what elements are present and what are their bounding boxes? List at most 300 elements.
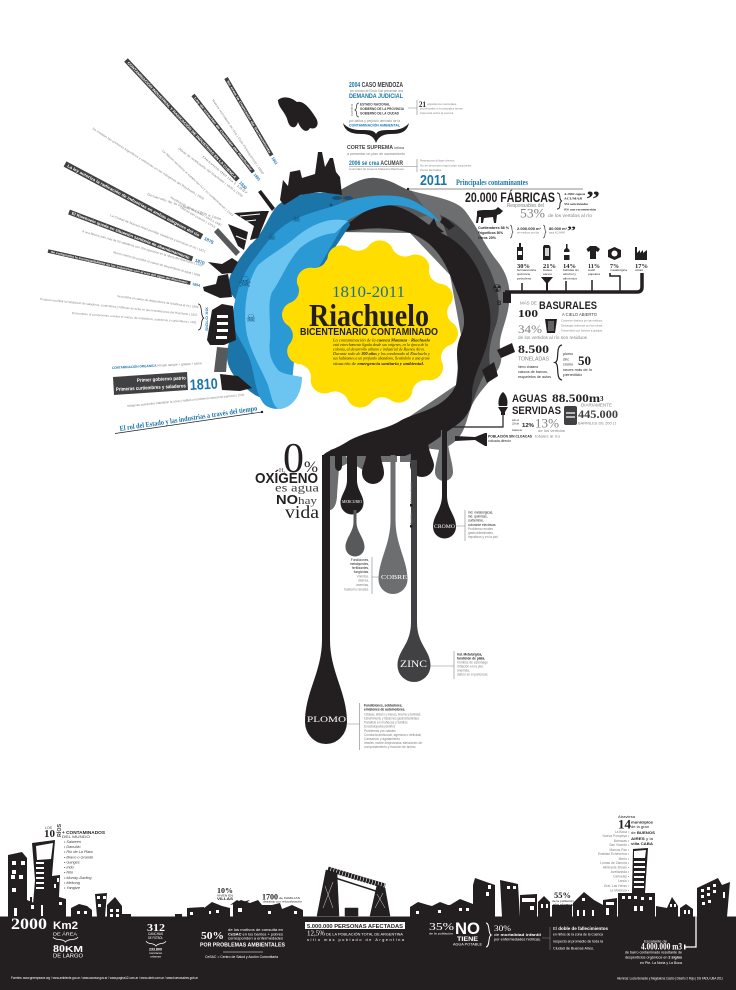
- ships on the right bank: [497, 343, 515, 358]
- sewage block: totales al río: [535, 434, 560, 438]
- drips of heavy metals: CROMO: [434, 525, 455, 530]
- bar 1870: 1870: [194, 258, 206, 266]
- ten rivers list: LOS: [45, 826, 53, 830]
- Mendoza case column: injerencia sobre la cuenca.: [420, 111, 454, 115]
- villas and families: 10%: [217, 886, 233, 895]
- bar 1875: [64, 161, 215, 246]
- factory skyline: [280, 152, 342, 205]
- note: lead: Cansancio y agotamiento: [364, 737, 400, 741]
- note: chromium: hepáticos y en la piel.: [468, 535, 499, 539]
- note: zinc: Vómitos de estómago: [457, 660, 488, 664]
- sewage block: 12%: [522, 423, 535, 429]
- scrap metal block: 8.500: [518, 342, 549, 356]
- radial notes: Nueva normativa de ríos | Polo Petroquímico | 1960: [211, 98, 265, 176]
- Mendoza case column: [343, 80, 472, 172]
- icon: drop and pipe: [498, 392, 508, 415]
- scrap metal block: cromo: [563, 362, 573, 366]
- municipality list: Lomas de Zamora •: [600, 861, 630, 865]
- football pitches: urbanas: [150, 954, 162, 958]
- villas and families: VILLAS: [217, 897, 234, 901]
- sewage block: 445.000: [578, 409, 618, 421]
- first government block: CONTAMINACIÓN ORGÁNICA Arrojan sangre + grasas + carne: [112, 360, 202, 370]
- radial notes: Rectificación del Riachuelo | 1916 a 1930: [170, 195, 222, 227]
- bar 1870: El Riachuelo queda en situación sanitaria de abandonamiento: [71, 211, 191, 260]
- ten rivers list: • Nilo: [64, 870, 73, 874]
- industry icons and percentages: bebidas sin: [563, 268, 579, 272]
- fourteen municipalities: villa CABA: [631, 841, 653, 846]
- basin size: 2000: [11, 916, 47, 933]
- mud volume: de barro contaminado resultante de: [625, 950, 682, 954]
- municipality list: Merlo •: [619, 857, 630, 861]
- industry icons and percentages: 17%: [635, 263, 648, 270]
- sewage block: DIARIAMENTE: [581, 402, 612, 408]
- radial notes: La Ciudad de Buenos Aires prohíbe saladeros y barracas al río | 1871: [110, 213, 207, 254]
- note: zinc: Ind. Metalúrgica,: [457, 652, 482, 656]
- landfills block: Contienen distintos por las residuos.: [561, 318, 603, 322]
- landfills block: Descargas indirectas por las rutinas.: [561, 324, 603, 328]
- role of the state heading: El rol del Estado y las industrias a través del tiempo: [119, 404, 258, 433]
- industry icons and percentages: farmacéutica: [517, 268, 536, 272]
- fourteen municipalities: 14: [618, 816, 632, 832]
- fourteen municipalities: municipios: [631, 820, 653, 824]
- no sewers stat: [552, 891, 575, 907]
- cow icon: [476, 207, 503, 223]
- Mendoza case column: 2006 se crea ACUMAR: [349, 160, 403, 167]
- municipality list: Avellaneda •: [611, 870, 630, 874]
- note: zinc: anemias,: [457, 668, 470, 672]
- icon: can: [543, 245, 550, 260]
- sewage block: 12% del: [512, 422, 519, 426]
- brace century: SIGLO XIX: [205, 306, 209, 331]
- football pitches: [146, 923, 166, 958]
- affected people: DE LA POBLACIÓN TOTAL DE ARGENTINA: [326, 932, 403, 936]
- municipality list: Nueva Pompeya •: [603, 834, 630, 838]
- radial notes: La Nación reconoce el estado del río y su contaminación | 1943: [161, 149, 235, 217]
- note: copper: [344, 557, 379, 594]
- infant mortality: [494, 924, 609, 950]
- note: chromium: curtiembre,: [468, 518, 484, 522]
- ten rivers list: • Danubio: [64, 845, 81, 849]
- factories block: de residuos por día: [517, 230, 540, 234]
- sewage block: tratamiento: [512, 428, 522, 432]
- Mendoza case column: 2004 CASO MENDOZA: [349, 80, 403, 89]
- villas and families: [217, 886, 302, 904]
- first government block: Primeras curtiembres y saladeros: [116, 383, 186, 393]
- bottom skyline windows: [11, 843, 725, 917]
- sewage block: sólo el: [512, 418, 519, 422]
- radial notes: Encuentran al compromiso a evitar el vuelco de mataderos, saladeros y curtiembres | 1811: [72, 311, 197, 324]
- landfills block: [518, 300, 603, 341]
- central title: [300, 284, 438, 366]
- scrap metal block: zinc: [563, 358, 569, 362]
- municipality list: La Boca •: [615, 830, 630, 834]
- first government block: [112, 360, 263, 434]
- central title: Riachuelo: [309, 297, 429, 333]
- main polluters heading: Principales contaminantes: [456, 178, 528, 187]
- vertical labels: [409, 481, 413, 528]
- drips of heavy metals: ZINC: [400, 659, 427, 669]
- no potable water: 35%: [429, 922, 454, 933]
- scrap metal block: plomo: [563, 352, 573, 356]
- zero oxygen statement: vida: [285, 502, 319, 522]
- no sewers stat: de la población: [552, 899, 574, 903]
- landfills block: BASURALES: [539, 300, 597, 312]
- trumpet outlet: [455, 433, 487, 446]
- villas and families: VIVEN EN: [217, 894, 233, 898]
- ten rivers list: • Bravo o Grande: [64, 856, 93, 860]
- factories block: 20.000 FÁBRICAS: [465, 190, 555, 205]
- transporter bridge: [317, 869, 390, 916]
- ten rivers list: • Ganges: [64, 860, 80, 864]
- football pitches: 233.800: [149, 948, 162, 952]
- note: zinc: fundición de plata.: [457, 656, 485, 660]
- bottom black band: [0, 916, 736, 990]
- icon: factory: [635, 247, 647, 260]
- factory silhouettes on top band: [425, 218, 444, 234]
- ships: [228, 211, 269, 250]
- sewage block: BARRILES DE 200 Lt: [578, 422, 616, 426]
- industry icons and percentages: tintes: [543, 268, 553, 272]
- icon: radiation: ☢: [492, 282, 502, 295]
- sewage block: volcada directo: [488, 439, 511, 443]
- Mendoza case column: por daños y perjuicio derivado de la: [349, 119, 400, 123]
- mustache brace: [343, 123, 409, 143]
- drip: chromium grey: [435, 430, 453, 481]
- zero oxygen statement: OXÍGENO: [255, 470, 318, 487]
- drip: lead: [305, 455, 347, 744]
- factories block: Otros 20%: [478, 236, 497, 240]
- factories block: Responsables del: [507, 203, 544, 209]
- Mendoza case column: No se denuncia ningún plan sanciones.: [420, 164, 472, 168]
- drip: mercury: [340, 445, 364, 514]
- industry icons and percentages: alcohol y: [563, 272, 577, 276]
- industry icons and percentages: 11%: [588, 263, 600, 270]
- fourteen municipalities: Atraviesa: [618, 815, 635, 819]
- factories block: [465, 186, 600, 240]
- note: lead: Conducta antisocial, agresiva o delictual: [364, 733, 421, 737]
- note: lead: Estreñimiento y trastornos gastrointestinales: [364, 716, 419, 720]
- mud volume: 4.000.000 m3: [641, 942, 682, 952]
- ten rivers list: DEL MUNDO: [62, 834, 90, 839]
- drips of heavy metals: MERCURIO: [342, 499, 362, 504]
- credits line: Alumnas: Lucía Bonadío y Magdalena Castro | Diseño 2 Rojo | DG FADU UBA 2011: [617, 976, 723, 980]
- infant mortality: Ciudad de Buenos Aires.: [553, 946, 594, 950]
- infant mortality: respecto al promedio de toda la: [553, 940, 604, 944]
- radial notes: Obras de rectificación del Riachuelo | 1936 a 1939: [177, 147, 244, 198]
- industry icons and percentages: metalúrgica: [610, 268, 627, 272]
- ten rivers list: • Indo: [64, 866, 74, 870]
- yellow seal: [282, 240, 458, 408]
- ten rivers list: • Yangtze: [64, 886, 80, 890]
- note: chromium: Ind. metalúrgicas,: [468, 510, 493, 514]
- note: copper: metalquedes,: [350, 562, 369, 566]
- factories block: agua ACUMAR: [549, 230, 565, 234]
- zero oxygen statement: H₂: [279, 468, 285, 474]
- no potable water: NO: [455, 920, 480, 938]
- intro paragraph: La contaminación de la cuenca Matanza - Riachuelo: [332, 338, 430, 342]
- first government block: Primer gobierno patrio: [137, 375, 186, 384]
- affected people: sitio más poblado de Argentina: [307, 937, 405, 942]
- infant mortality: de mortalidad infantil: [494, 932, 541, 937]
- icon: shirt: [586, 246, 600, 259]
- central title: 1810-2011: [332, 284, 405, 301]
- basin size: KM: [65, 945, 83, 954]
- municipality list: Cañuelas •: [613, 874, 630, 878]
- municipality list: Lanús •: [618, 879, 630, 883]
- note: copper: fertilizantes,: [352, 566, 369, 570]
- consultation stat: [200, 928, 285, 959]
- note: zinc: Irritación en la piel,: [457, 664, 484, 668]
- scrap metal block: 50: [578, 353, 591, 368]
- factories block: ”: [567, 223, 576, 238]
- bar 1870: [68, 210, 206, 266]
- municipality list: Gral. Las Heras •: [604, 884, 630, 888]
- bar 1961: 1961: [271, 156, 279, 166]
- zero oxygen statement: hay: [298, 495, 318, 507]
- drip: zinc: [398, 460, 430, 682]
- no potable water: [429, 920, 491, 947]
- no sewers stat: 55%: [554, 891, 571, 900]
- ten rivers list: 10: [44, 828, 56, 840]
- vertical labels: Hidrocarburos: [409, 481, 413, 504]
- drips of heavy metals: COBRE: [381, 574, 407, 581]
- icon: small bottle: [564, 244, 570, 260]
- icons on blue river: ☠: [292, 214, 301, 225]
- industry icons and percentages: papelera: [588, 272, 600, 276]
- factories block: 80.000 m³: [549, 227, 568, 231]
- note: chromium: Problema renales: [468, 527, 493, 531]
- municipality list: Esteban Echeverría •: [598, 852, 630, 856]
- note: copper: diarrea,: [358, 578, 369, 582]
- municipality list: San Vicente •: [609, 843, 630, 847]
- icons on blue river: ☠: [246, 312, 256, 325]
- zero oxygen statement: 0: [283, 436, 304, 482]
- landfills block: Transmitido por fuentes a granjas.: [561, 328, 603, 332]
- infant mortality: en niños de la zona de la Cuenca: [553, 932, 604, 936]
- industry icons and percentages: [492, 243, 648, 307]
- infant mortality: 30%: [494, 924, 511, 933]
- basin size: Km2: [53, 920, 78, 932]
- bar 1854: 1854: [192, 282, 201, 288]
- municipality list: [598, 830, 630, 892]
- scrap metal block: esqueletos de autos: [518, 375, 551, 379]
- vertical labels: Plaguicidas: [409, 513, 413, 525]
- dark box: [113, 372, 188, 395]
- industry icons and percentages: química: [517, 272, 530, 276]
- left towers: [8, 840, 66, 917]
- main polluters heading: 2011: [420, 172, 447, 189]
- Mendoza case column: los vecinos del Dock Sud presentan una: [350, 89, 403, 93]
- bar 1950: [191, 93, 262, 182]
- left houses: [187, 900, 303, 917]
- note: chromium: colorante eléctricas.: [468, 523, 496, 527]
- consultation stat: de los motivos de consulta en: [228, 928, 283, 932]
- industry icons and percentages: 14%: [563, 263, 576, 270]
- ten rivers list: [44, 823, 106, 890]
- scrap metal block: permitido: [563, 373, 582, 377]
- percentages: 30%: [517, 263, 530, 270]
- industry icons and percentages: 21%: [543, 263, 556, 270]
- bottom skyline: [8, 840, 730, 917]
- bar 1961: Se crea la Comisión de Saneamiento: [226, 80, 272, 154]
- radial notes: [40, 98, 265, 324]
- landfills block: 34%: [518, 322, 542, 336]
- note: lead: Problemas pre natales: [364, 729, 396, 733]
- black river ring: [322, 205, 491, 462]
- sewage block: SERVIDAS: [512, 405, 561, 417]
- factories block: 2.000.000 m³: [517, 227, 542, 231]
- note: lead: Cefaleas, atiborro y mareos, Anemia y debilidad,: [364, 712, 421, 716]
- Mendoza case column: provinciales y municipales tienen: [420, 106, 463, 110]
- zero oxygen statement: [255, 436, 319, 522]
- consultation stat: 50%: [201, 930, 224, 942]
- consultation stat: corresponden a enfermedades: [228, 936, 283, 940]
- main polluters heading: [407, 172, 583, 190]
- radial notes: Desarrollo de la industria | 1906 a 1930: [147, 192, 222, 222]
- note: lead: emisiones de automotores.: [364, 708, 405, 712]
- radial notes: Producen prohibir la instalación de saladeros, curtiembres y fábricas de sebo en las inmediaciones del Riachuelo | 1822: [40, 297, 198, 317]
- football pitches: CANCHAS: [148, 932, 164, 936]
- drip: chromium: [433, 430, 456, 538]
- bar 1950: 1950: [253, 172, 262, 182]
- consultation stat: POR PROBLEMAS AMBIENTALES: [200, 942, 285, 948]
- ten rivers list: • Murray-Darling: [64, 876, 92, 880]
- football pitches: DE FÚTBOL: [148, 936, 163, 940]
- radial notes: Se prohíbe el vuelco de desperdicios de la fábrica al río | 1860: [117, 294, 199, 309]
- factories block: 9% con reconversión: [564, 208, 596, 212]
- note: lead: Fundiciones, soldadores,: [364, 704, 403, 708]
- Mendoza case column: DEMANDA JUDICIAL: [349, 93, 403, 100]
- agency note: Presentaciones de llegar a términos.: [420, 158, 455, 162]
- radial notes: Desvíos del río | 1937: [201, 155, 249, 195]
- note: lead: Infantes, muerte desprolonada, alteraciones del: [364, 741, 422, 745]
- Mendoza case column: a presentar un plan de saneamiento: [347, 152, 405, 156]
- ten rivers list: • Mekong: [64, 881, 81, 885]
- fourteen municipalities: de la gran: [631, 825, 649, 829]
- factories block: 4.000 agua: [563, 192, 585, 196]
- icons on blue river: ☠: [238, 273, 251, 291]
- basin size: [11, 916, 84, 960]
- basin size: DE ÁREA: [53, 930, 78, 938]
- note: zinc: daños en el páncreas.: [457, 672, 488, 676]
- intro paragraph: colonia, al desarrollo urbano e industrial de Buenos Aires.: [333, 346, 425, 352]
- landfills block: de los vertidos al río son residuos: [518, 335, 588, 341]
- industry icons and percentages: petrolera: [517, 276, 531, 280]
- bar 1930: [124, 58, 248, 191]
- affected people: 12,5%: [307, 930, 325, 938]
- blue river layers: [227, 193, 440, 409]
- radial notes: Se instalan las primeras frigoríficos y refinerías en las márgenes del Riachuelo | 1902: [91, 126, 205, 201]
- no sewers stat: sin cloacas: [553, 903, 575, 907]
- zero oxygen statement: %: [304, 459, 318, 476]
- industry icons and percentages: sanos: [543, 272, 553, 276]
- mud volume: [625, 916, 696, 965]
- scrap metal block: hierro chatarra: [518, 365, 538, 369]
- intro paragraph: Durante todo de 200 años y los condenado al Riachuelo y: [332, 351, 430, 356]
- note: lead: [347, 703, 422, 750]
- sewage block: 3: [600, 395, 604, 403]
- bar 1854: [47, 249, 201, 288]
- note: copper: Fundiciones,: [351, 558, 369, 562]
- scrap metal block: veces más de lo: [563, 368, 592, 372]
- drip: small black: [335, 440, 434, 484]
- note: copper: fungicidas.: [354, 570, 369, 574]
- infant mortality: por enfermedades hídricas.: [494, 938, 541, 942]
- 21 agencies: 21: [419, 100, 426, 109]
- drip: copper: [378, 455, 408, 594]
- bar 1875: 1875: [203, 236, 215, 245]
- ten rivers list: • Salween: [64, 840, 81, 844]
- note: copper: anemias,: [356, 583, 369, 587]
- pipe network: [505, 273, 642, 292]
- landfills block: 100: [518, 308, 539, 320]
- sources line: Fuentes: www.greenpeace.org / www.ambiente.gov.ar / www.acumar.gov.ar / www.pagina12.com.ar / www.clarin.com.ar / www.buenosaires.gob.ar: [11, 976, 199, 980]
- villas and families: de FAMILIAS: [279, 896, 300, 900]
- Mendoza case column: ESTADO NACIONAL: [360, 102, 391, 106]
- intro paragraph: situación de emergencia sanitaria y ambiental.: [333, 361, 424, 366]
- municipality list: Marcos Paz •: [610, 848, 630, 852]
- note: lead: Encefalopatía (delirio): [364, 724, 395, 728]
- industry icons and percentages: B: [497, 301, 502, 307]
- note: chromium: gastrointestinales,: [468, 531, 494, 535]
- scrap metal block: TONELADAS: [518, 356, 549, 362]
- brace century: [198, 304, 209, 331]
- Mendoza case column: GOBIERNO DE LA CIUDAD: [360, 112, 399, 116]
- landfills block: MÁS DE: [520, 300, 537, 306]
- smoke cloud: [278, 97, 318, 131]
- radial notes: A una fábrica solo más de 50 saladeros con 700 operarios en la ribera del Riachuelo | 1869: [82, 229, 203, 268]
- sewage block: AGUAS: [512, 393, 547, 405]
- basin size: DE LARGO: [53, 954, 84, 960]
- Mendoza case column: contra: [350, 104, 354, 116]
- zero oxygen statement: es agua: [275, 482, 319, 494]
- scrap metal block: [518, 342, 592, 380]
- industry icons and percentages: 7%: [610, 263, 619, 270]
- icons on blue river: [238, 196, 353, 325]
- Mendoza case column: organismos nacionales,: [427, 102, 457, 106]
- affected people: [305, 922, 405, 942]
- consultation stat: CeSAC en los barrios + pobres: [228, 932, 283, 936]
- factories block: 53%: [520, 206, 545, 220]
- sewage block: 13%: [535, 416, 559, 430]
- intro paragraph: está estrechamente ligada desde sus orígenes, en la época de la: [333, 342, 428, 348]
- zero oxygen statement: NO: [276, 492, 298, 507]
- note: copper: Vómitos,: [357, 574, 369, 578]
- basin size: 80: [53, 943, 66, 955]
- note: zinc: [430, 651, 488, 679]
- municipality list: Barracas •: [614, 839, 630, 843]
- bar 1950: Ley de creación de Comisión del Riachuelo: [193, 96, 253, 171]
- no potable water: TIENE: [457, 936, 479, 943]
- city silhouette around the river: [203, 97, 515, 391]
- bar 1961: [224, 77, 279, 166]
- ten rivers list: + CONTAMINADOS: [62, 830, 106, 836]
- drips of heavy metals: [305, 430, 456, 744]
- factories block: Curtiembres 58 %: [478, 226, 510, 230]
- consultation stat: CeSAC = Centro de Salud y Acción Comunitaria: [205, 955, 278, 959]
- Mendoza case column: GOBIERNO DE LA PROVINCIA: [360, 107, 404, 111]
- infant mortality: El doble de fallecimientos: [553, 926, 609, 931]
- factories block: 554 sancionadas: [564, 202, 589, 206]
- villas and families: desalojo por relocalización: [263, 900, 302, 904]
- villas and families: 1700: [262, 892, 278, 902]
- mud volume: Escalante de: [644, 940, 667, 944]
- mud volume: en Pte. La Noria y La Boca: [640, 961, 682, 965]
- fourteen municipalities: AIRES y la: [631, 836, 654, 841]
- first government block: Indígenas querandíes habitaban la zona y hablan un problema natural del partículo | 1536: [127, 393, 245, 408]
- Mendoza case column: Zonas afectadas.: [420, 168, 442, 172]
- icon: trash can: [545, 319, 557, 333]
